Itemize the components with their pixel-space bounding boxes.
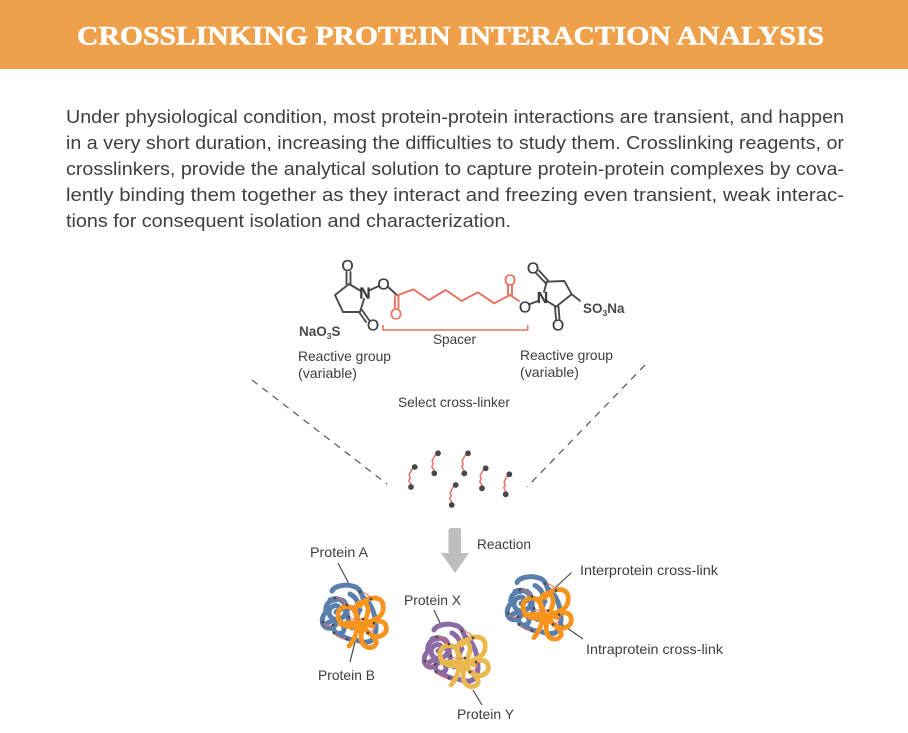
sodium sulfonate labels: NaO — [299, 324, 327, 339]
left reactive group bonds — [335, 272, 397, 322]
left reactive group label: Reactive group — [298, 348, 391, 364]
crosslinked complex example — [507, 577, 571, 639]
right reactive group label: Reactive group — [520, 347, 613, 363]
dashed funnel lines — [252, 365, 645, 487]
intro paragraph: crosslinkers, provide the analytical solution to capture protein-protein complexes by cova- — [66, 158, 844, 179]
sodium sulfonate labels: SO — [583, 301, 603, 316]
left reactive group label — [298, 348, 391, 381]
intro paragraph: lently binding them together as they interact and freezing even transient, weak interac- — [66, 184, 844, 205]
left reactive group label: (variable) — [298, 365, 357, 381]
atoms — [341, 258, 564, 334]
spacer bracket — [383, 325, 528, 330]
right reactive group label: (variable) — [520, 364, 579, 380]
header banner — [0, 0, 908, 69]
protein B label: Protein B — [318, 667, 375, 683]
atoms: O — [519, 300, 531, 316]
right reactive group bonds — [530, 270, 580, 319]
reaction label: Reaction — [477, 536, 531, 552]
atoms: O — [390, 306, 402, 324]
atoms: O — [504, 272, 516, 290]
intro paragraph — [66, 106, 844, 231]
sodium sulfonate labels: S — [332, 324, 341, 339]
sodium sulfonate labels: 3 — [327, 331, 332, 341]
right reactive group label — [520, 347, 613, 380]
atoms: O — [377, 276, 390, 294]
spacer chain — [395, 285, 519, 308]
spacer label: Spacer — [433, 331, 476, 347]
protein Y label: Protein Y — [457, 706, 515, 722]
atoms: O — [367, 318, 379, 334]
atoms: O — [552, 318, 564, 334]
protein complex X and Y — [424, 624, 488, 687]
intro paragraph: Under physiological condition, most protein-protein interactions are transient, and happen — [66, 106, 844, 127]
interprotein cross-link label: Interprotein cross-link — [580, 562, 719, 578]
chemical structure: cross-linker molecule — [299, 258, 625, 341]
atoms: O — [341, 258, 354, 275]
intro paragraph: tions for consequent isolation and characterization. — [66, 210, 511, 231]
cross-linker molecules — [408, 450, 512, 508]
atoms: N — [359, 286, 371, 302]
intro paragraph: in a very short duration, increasing the difficulties to study them. Crosslinking reagents, or — [66, 132, 844, 153]
protein A label: Protein A — [310, 544, 369, 560]
sodium sulfonate labels: Na — [607, 301, 625, 316]
select cross-linker label: Select cross-linker — [398, 394, 510, 410]
sodium sulfonate labels — [299, 301, 625, 341]
atoms: N — [537, 290, 548, 307]
reaction arrow — [441, 528, 469, 573]
protein X label: Protein X — [404, 592, 462, 608]
intraprotein cross-link label: Intraprotein cross-link — [586, 641, 724, 657]
title: CROSSLINKING PROTEIN INTERACTION ANALYSIS — [77, 22, 824, 50]
leader lines — [338, 563, 583, 705]
atoms: O — [527, 260, 539, 278]
sodium sulfonate labels: 3 — [603, 308, 608, 318]
protein complex A and B — [322, 585, 386, 648]
